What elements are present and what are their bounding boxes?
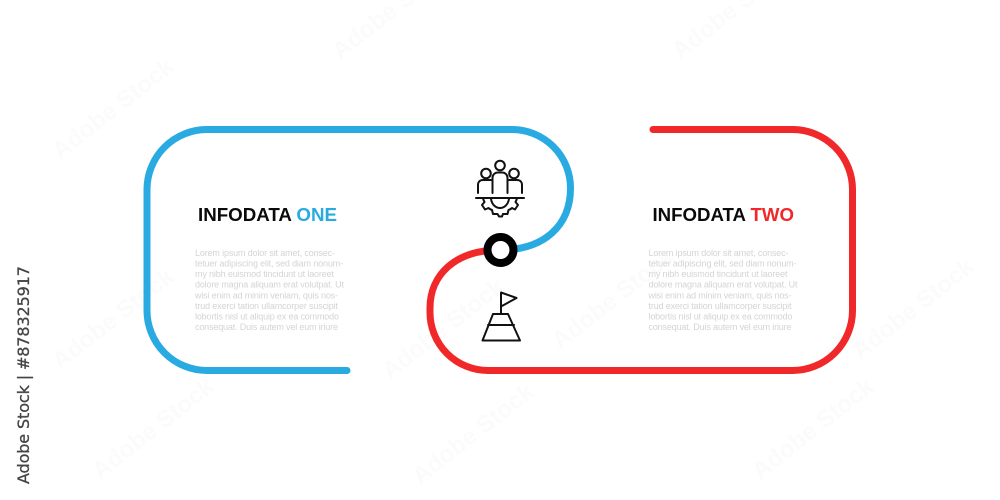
blue connector line	[147, 130, 570, 370]
body text: infodata one: Lorem ipsum dolor sit amet, consec-	[195, 248, 335, 258]
stock watermark pattern: Adobe Stock	[407, 378, 540, 490]
icon: flag on mountain	[482, 292, 520, 340]
body text: infodata one	[194, 248, 344, 332]
side label: adobe stock id: Adobe Stock | #878325917	[14, 266, 33, 484]
red connector line	[430, 130, 852, 370]
body text: infodata one: lobortis nisl ut aliquip ex ea commodo	[195, 312, 339, 322]
stock watermark pattern: Adobe Stock	[47, 53, 180, 165]
stock watermark pattern: Adobe Stock	[747, 373, 880, 485]
body text: infodata one: tetuer adipiscing elit, sed diam nonum-	[195, 258, 343, 268]
heading: infodata two: INFODATA TWO	[652, 205, 794, 225]
stock watermark pattern: Adobe Stock	[47, 263, 180, 375]
stock watermark pattern: Adobe Stock	[547, 243, 680, 355]
stock watermark pattern: Adobe Stock	[87, 373, 220, 485]
body text: infodata two: trud exerci tation ullamcorper suscipit	[648, 301, 792, 311]
body text: infodata two: consequat. Duis autem vel eum iriure	[648, 322, 792, 332]
body text: infodata two: Lorem ipsum dolor sit amet, consec-	[648, 248, 788, 258]
body text: infodata one: my nibh euismod tincidunt ut laoreet	[195, 269, 334, 279]
body text: infodata one: consequat. Duis autem vel eum iriure	[195, 322, 338, 332]
body text: infodata one: wisi enim ad minim veniam, quis nos-	[194, 290, 338, 300]
central black ring node	[488, 237, 514, 263]
stock watermark pattern: Adobe Stock	[377, 273, 510, 385]
stock watermark pattern: Adobe Stock	[847, 253, 980, 365]
heading: infodata one: INFODATA ONE	[198, 205, 337, 225]
body text: infodata two: my nibh euismod tincidunt ut laoreet	[648, 269, 788, 279]
body text: infodata two: dolore magna aliquam erat volutpat. Ut	[648, 280, 798, 290]
body text: infodata two: wisi enim ad minim veniam, quis nos-	[648, 290, 792, 300]
icon: team and gear	[476, 161, 524, 216]
body text: infodata two: lobortis nisl ut aliquip ex ea commodo	[648, 312, 792, 322]
body text: infodata two	[648, 248, 798, 332]
panel text: infodata two	[648, 205, 798, 332]
body text: infodata one: dolore magna aliquam erat volutpat. Ut	[195, 280, 344, 290]
body text: infodata one: trud exerci tation ullamcorper suscipit	[195, 301, 338, 311]
panel text: infodata one	[194, 205, 344, 332]
body text: infodata two: tetuer adipiscing elit, sed diam nonum-	[648, 258, 796, 268]
